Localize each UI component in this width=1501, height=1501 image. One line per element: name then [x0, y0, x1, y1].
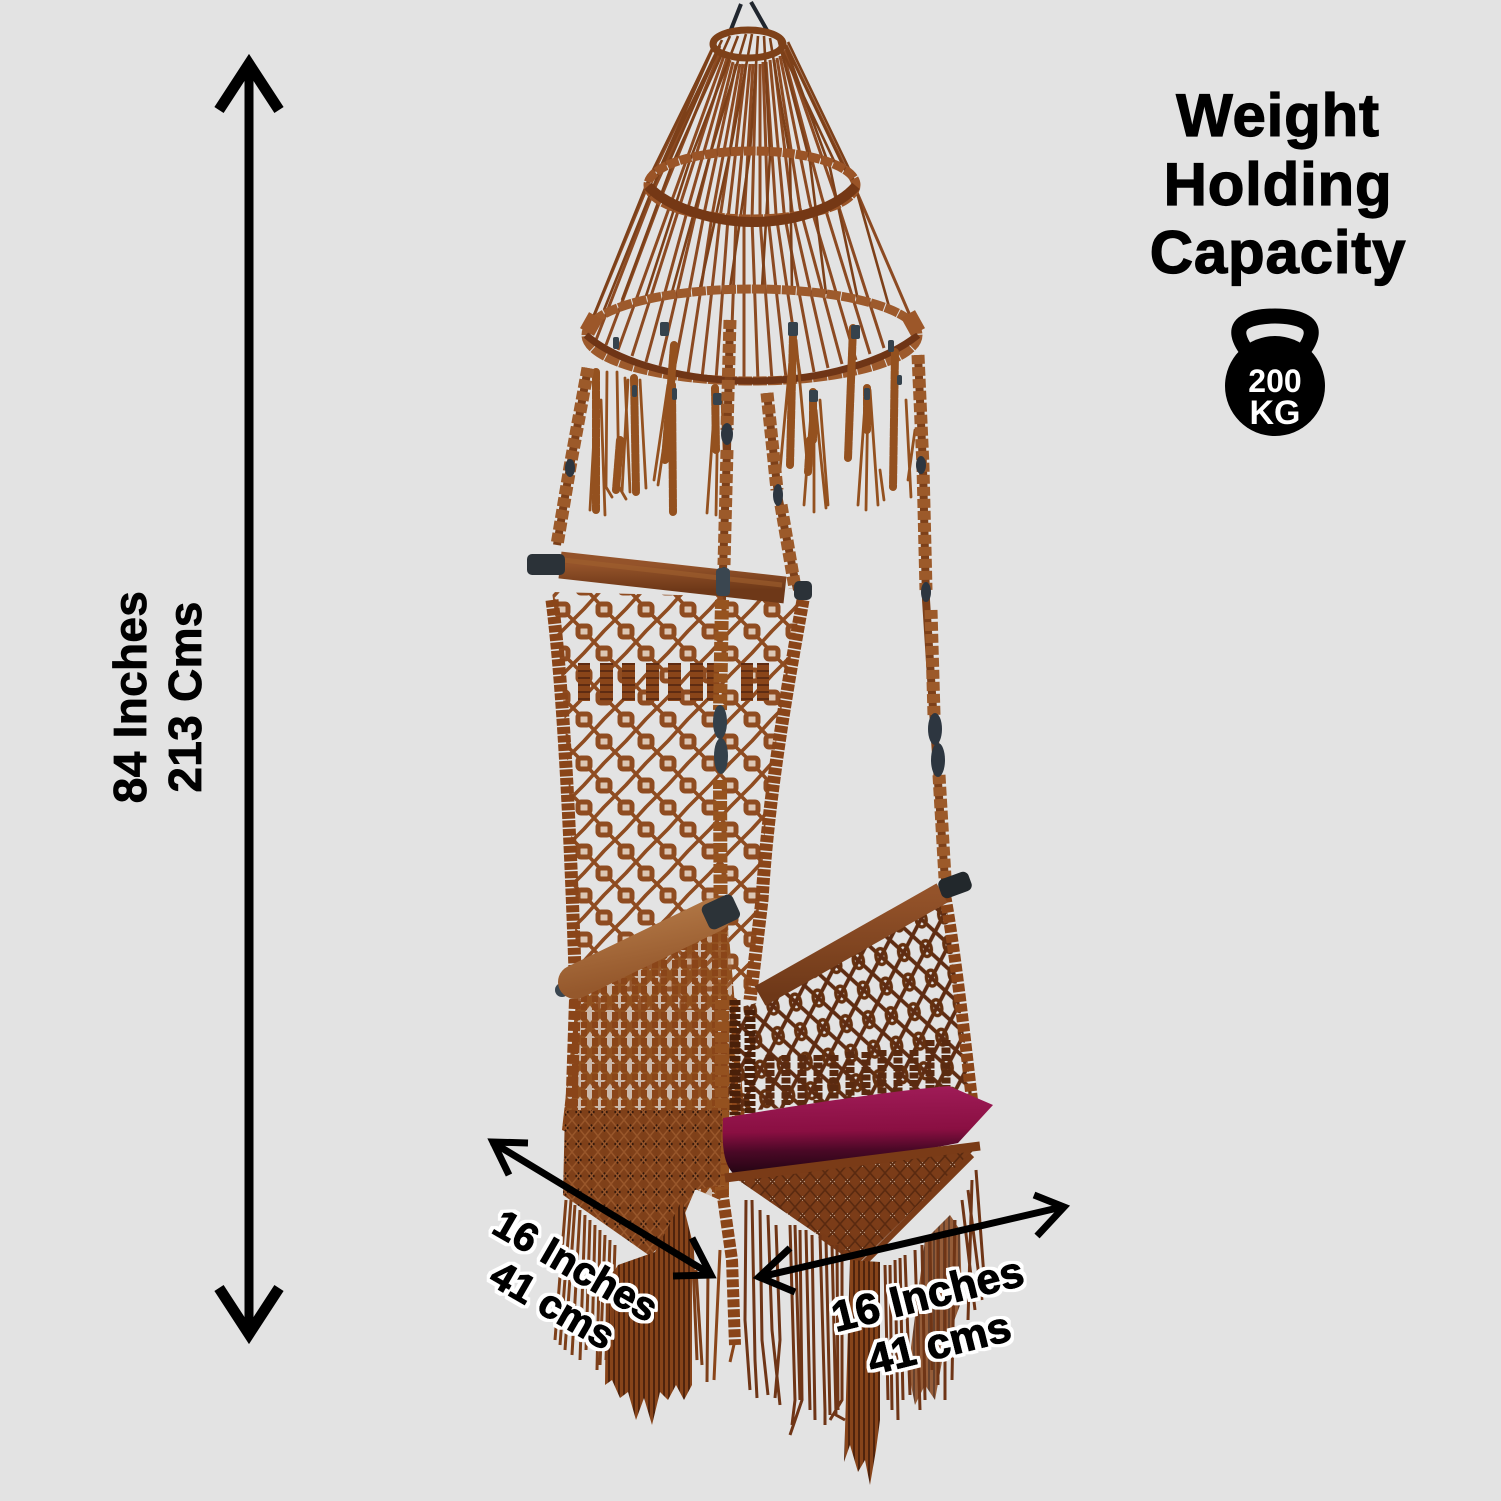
icon: kettlebell 200 KG: 200	[1248, 363, 1302, 399]
canopy rings	[586, 30, 918, 381]
left seat panel	[563, 1110, 722, 1256]
left fringe	[555, 1200, 708, 1425]
macrame swing chair photo	[527, 2, 993, 1485]
right fringe	[745, 1170, 985, 1485]
left width arrow	[492, 1142, 711, 1276]
suspension ropes	[557, 320, 945, 880]
seat cushion	[723, 1086, 993, 1175]
weight capacity heading: Capacity	[1150, 219, 1406, 286]
double beads over panel	[713, 567, 730, 774]
height arrow	[219, 62, 279, 1334]
height label: 84 Inches	[104, 591, 156, 803]
icon: kettlebell 200 KG: KG	[1250, 394, 1300, 432]
centre rope tail	[722, 1190, 735, 1345]
beads on canopy	[613, 322, 902, 405]
height label	[104, 591, 211, 803]
left width label: 41 cms	[482, 1253, 622, 1359]
right arm	[760, 870, 973, 996]
weight capacity heading: Holding	[1164, 151, 1392, 218]
right width label: 16 Inches	[827, 1248, 1029, 1342]
icon: kettlebell 200 KG	[1225, 316, 1325, 436]
back net panel	[552, 592, 803, 1010]
tassels	[590, 328, 915, 520]
canopy strands	[586, 34, 917, 382]
left side net	[562, 925, 745, 1200]
left arm	[555, 893, 742, 997]
height label: 213 Cms	[159, 601, 211, 793]
weight capacity heading: Weight	[1176, 82, 1380, 149]
weight capacity heading	[1150, 82, 1406, 286]
rope beads	[565, 423, 945, 777]
right width label: 41 cms	[863, 1303, 1016, 1385]
hanging hook	[730, 2, 768, 32]
seat front triangle	[725, 1146, 980, 1265]
vertical bars	[578, 663, 769, 701]
left width label: 16 Inches	[486, 1202, 665, 1331]
right width arrow	[759, 1195, 1064, 1292]
central rope over panel	[720, 600, 722, 1190]
right width label	[827, 1248, 1029, 1385]
right side net	[728, 895, 972, 1115]
top bar	[527, 554, 812, 600]
